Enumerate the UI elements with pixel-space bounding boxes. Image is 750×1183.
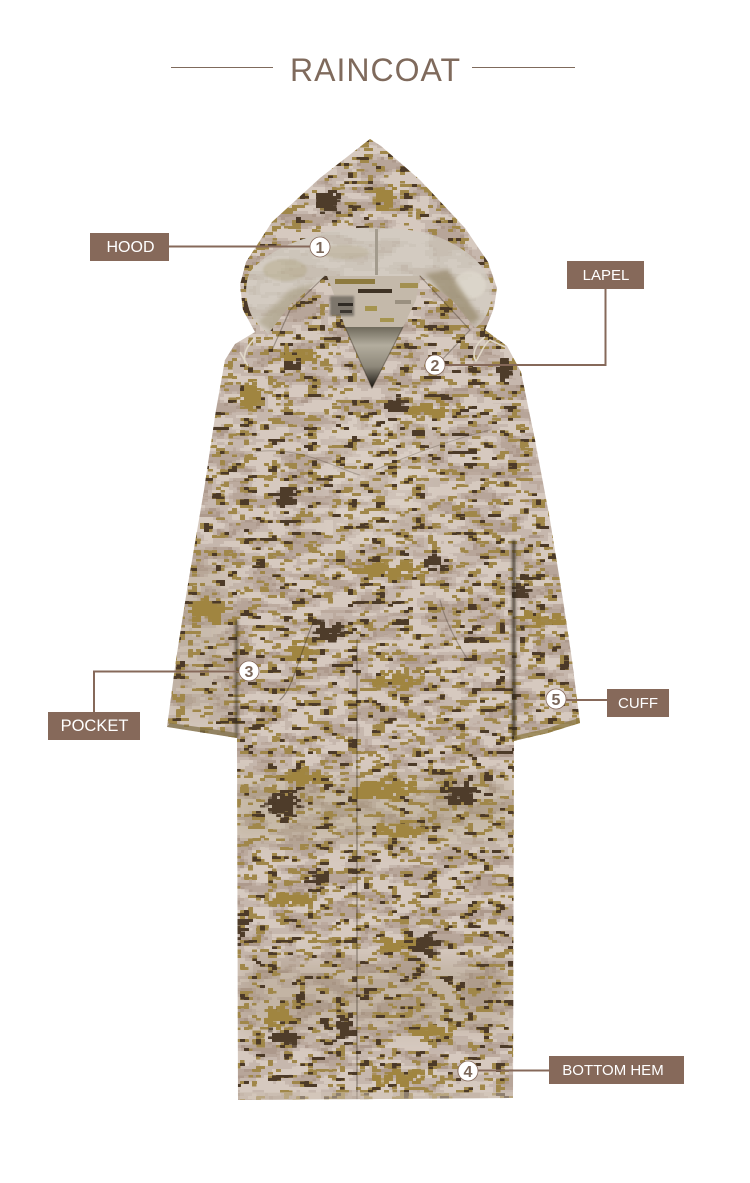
- callout: hood: HOOD: [106, 239, 154, 256]
- callout: pocket: POCKET: [61, 717, 128, 735]
- raincoat illustration: [160, 130, 590, 1110]
- folds: [255, 276, 490, 1100]
- callout: cuff: 5: [552, 692, 561, 709]
- inner collar: [327, 276, 420, 327]
- callout: pocket: 3: [245, 664, 254, 681]
- coat base camouflage: [160, 130, 590, 1110]
- olive and dark camouflage specks: [160, 130, 590, 1110]
- sleeve seams: [235, 540, 516, 740]
- title: RAINCOAT: [290, 52, 461, 88]
- callout: bottom hem: [458, 1056, 684, 1084]
- callout: lapel: 2: [431, 358, 440, 375]
- olive blotches: [187, 188, 564, 1083]
- callout: lapel: LAPEL: [583, 267, 629, 284]
- callout: hood: [90, 233, 330, 261]
- dark brown blotches: [236, 192, 526, 1043]
- broad tonal shading: [170, 420, 510, 1030]
- bottom hem band: [238, 1092, 514, 1100]
- callout: hood: 1: [316, 240, 325, 257]
- neck opening: [345, 327, 403, 388]
- callout: lapel: [425, 261, 644, 375]
- callout: bottom hem: 4: [464, 1064, 473, 1081]
- hood lining: [240, 225, 500, 335]
- hood drawstrings: [240, 337, 505, 366]
- callout: bottom hem: BOTTOM HEM: [562, 1062, 664, 1079]
- callout: pocket: [48, 661, 259, 740]
- callout: cuff: [546, 689, 669, 717]
- callout: cuff: CUFF: [618, 695, 658, 712]
- sleeve undersides: [167, 723, 237, 738]
